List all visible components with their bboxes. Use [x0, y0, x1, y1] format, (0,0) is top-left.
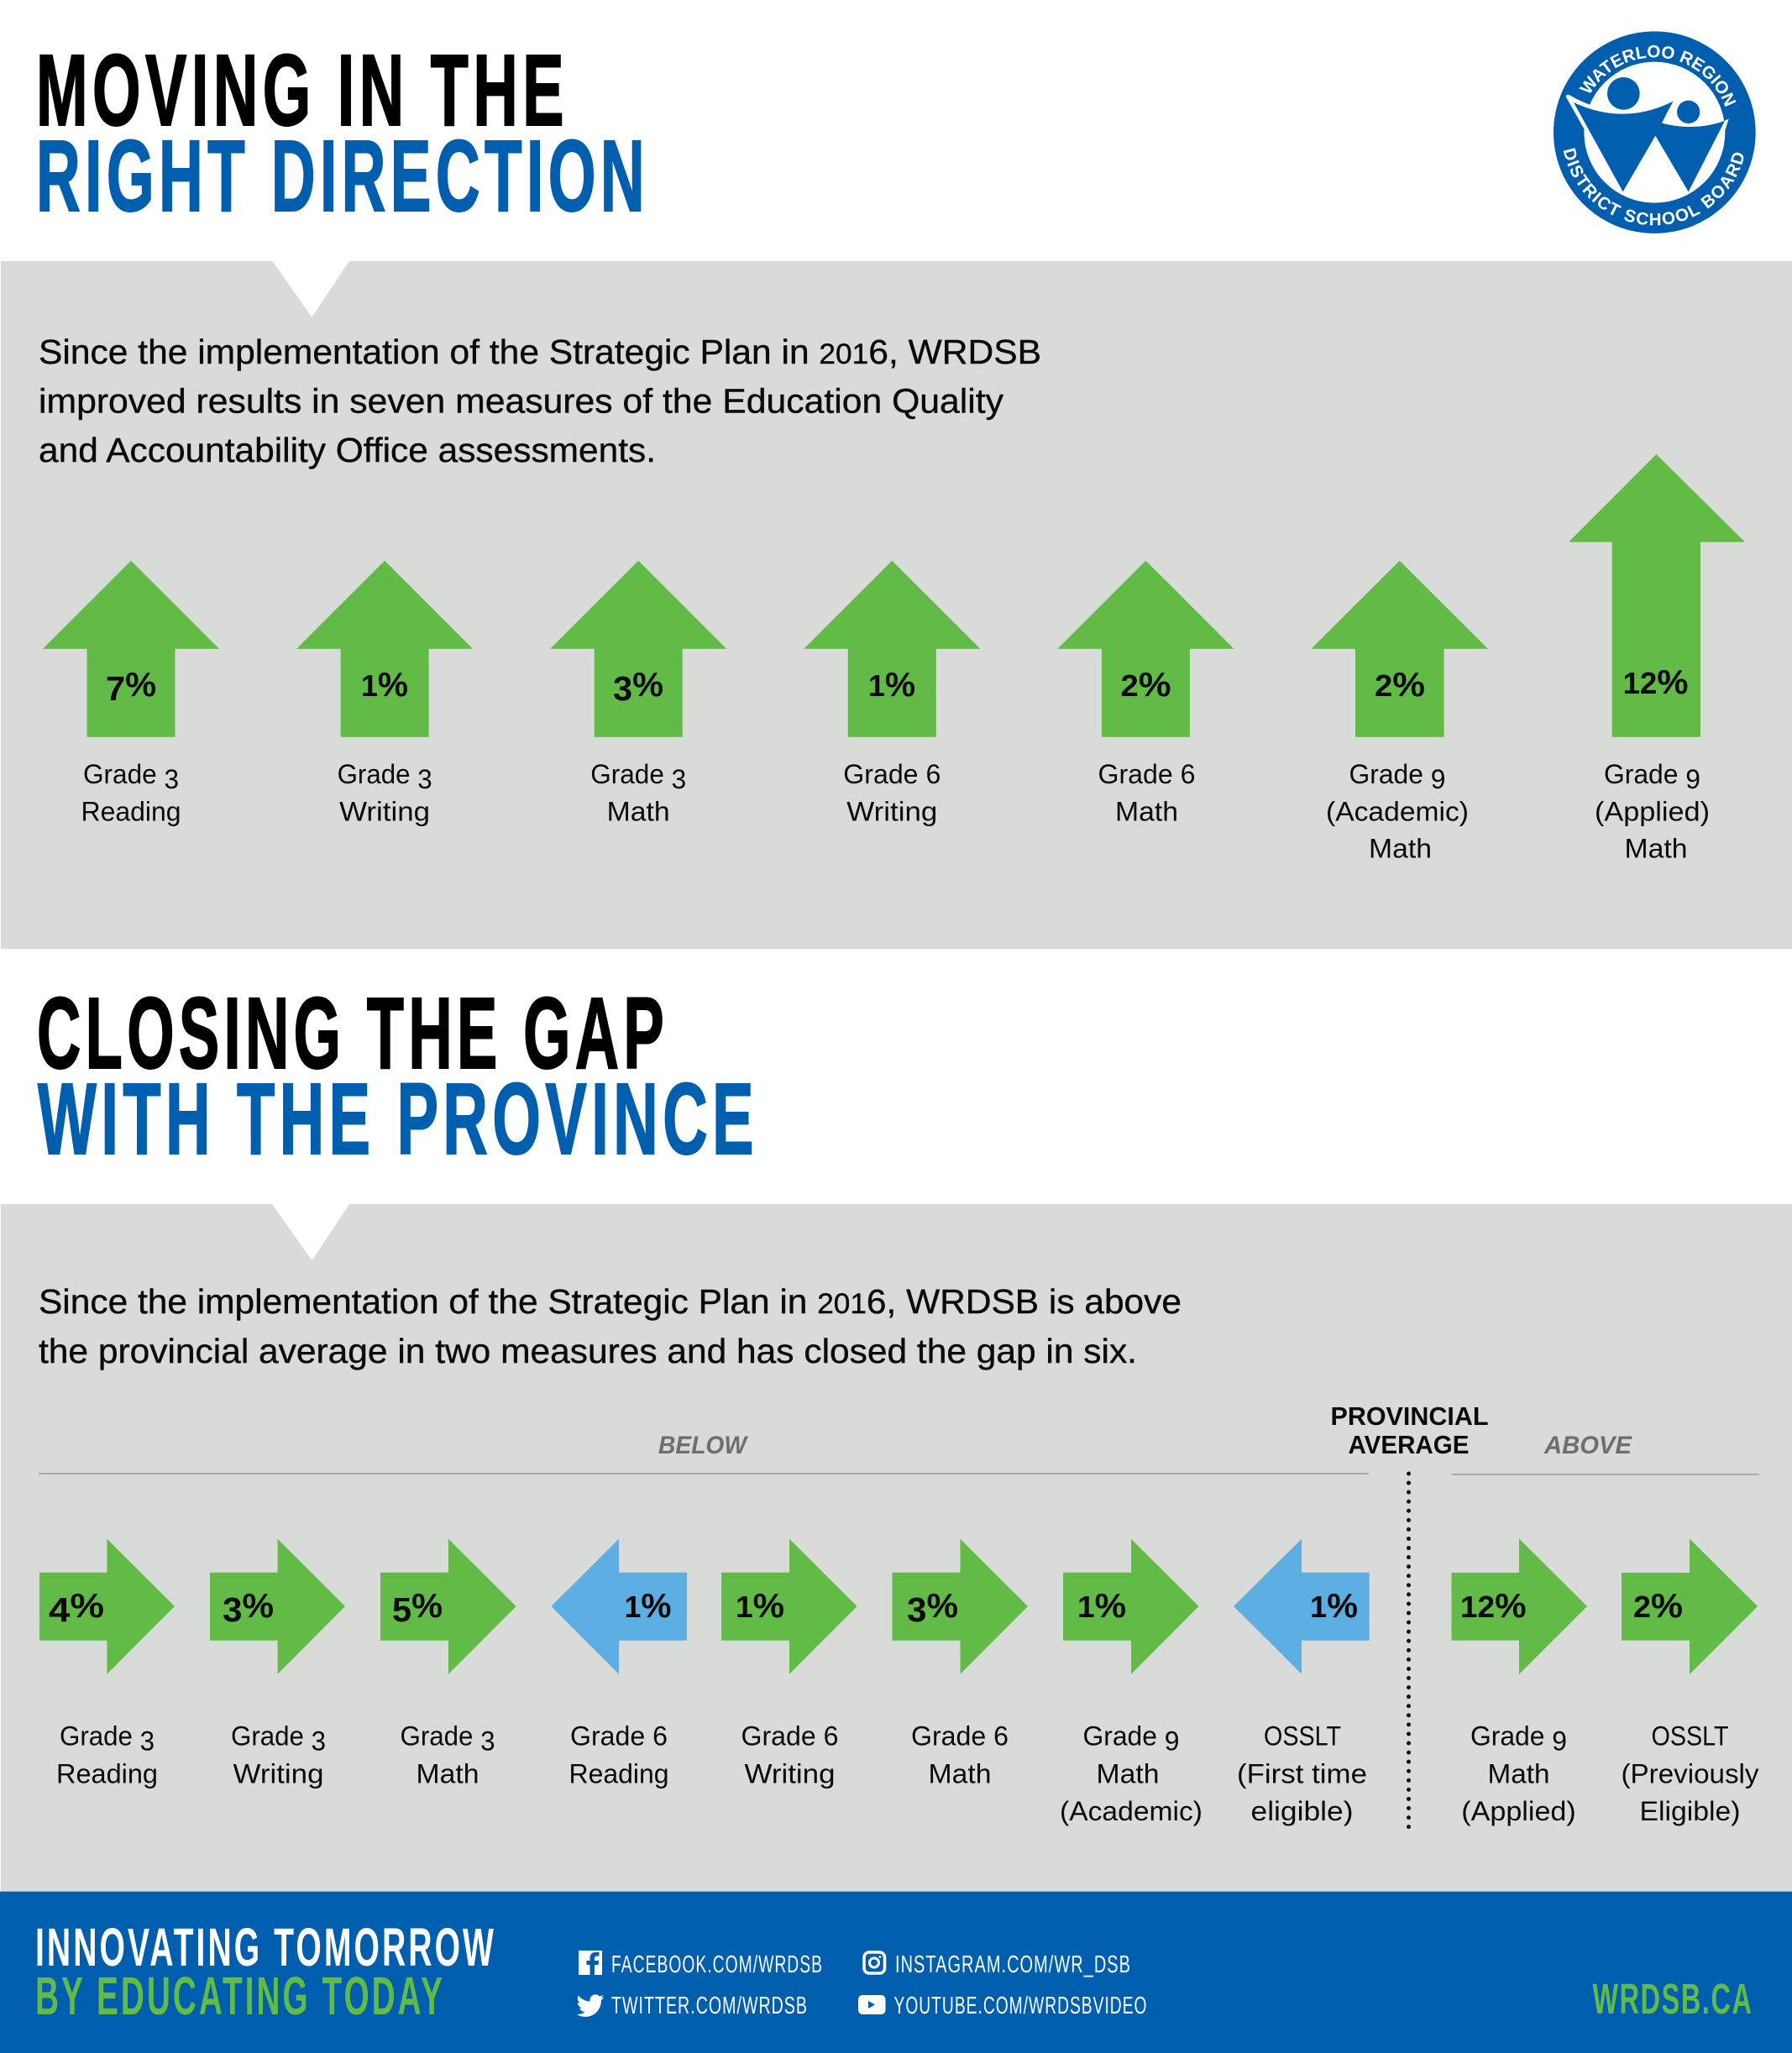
value: 3 [613, 669, 632, 708]
footer tagline: INNOVATING TOMORROW [35, 1917, 496, 1977]
up arrow [296, 561, 473, 737]
value: % [70, 1586, 104, 1625]
footer band [0, 1892, 1792, 2053]
title: closing the gap with the province: WITH THE PROVINCE [38, 1061, 758, 1176]
up arrow [1569, 454, 1745, 737]
label: 3 [672, 764, 686, 794]
intro text [39, 1282, 1182, 1370]
up arrow [550, 561, 726, 737]
intro text: and Accountability Office assessments. [39, 431, 656, 469]
right arrow [380, 1539, 516, 1674]
label: Writing [233, 1758, 324, 1789]
label: Writing [846, 796, 937, 826]
up arrow [804, 561, 980, 737]
right arrow [892, 1539, 1028, 1674]
label: (Applied) [1595, 796, 1710, 826]
scale heading: above: ABOVE [1543, 1432, 1632, 1459]
measure: Grade 3 Math 5% [380, 1539, 516, 1789]
label [1621, 1721, 1758, 1826]
label: Grade [1083, 1721, 1157, 1752]
label [569, 1721, 668, 1789]
label: 9 [1552, 1726, 1567, 1757]
value: % [125, 665, 156, 704]
label [1060, 1721, 1203, 1826]
measure: Grade 9 Applied Math 12% [1569, 454, 1745, 863]
label: Reading [56, 1758, 158, 1789]
label: (Academic) [1060, 1796, 1203, 1826]
title: moving in the right direction [36, 33, 649, 233]
label: Grade [60, 1721, 134, 1752]
footer tagline [35, 1917, 496, 2026]
label: 3 [164, 764, 179, 794]
label: Reading [569, 1758, 668, 1789]
up arrow [1057, 561, 1234, 737]
label: Math [417, 1758, 479, 1789]
label: Reading [81, 796, 181, 826]
label: OSSLT [1264, 1721, 1341, 1752]
measure: Grade 3 Writing 3% [210, 1539, 345, 1789]
value: % [411, 1586, 443, 1625]
intro text: Since the implementation of the Strategic Plan in 2016, WRDSB [39, 333, 1041, 371]
value: 12% [1460, 1586, 1527, 1625]
label: eligible) [1251, 1796, 1354, 1826]
label: Grade 6 [570, 1721, 668, 1752]
panel background with notch [1, 261, 1792, 949]
intro text: Since the implementation of the Strategic Plan in 2016, WRDSB is above [39, 1282, 1182, 1321]
panel: results improved [1, 261, 1792, 949]
logo: Waterloo Region District School Board: WATERLOO REGION [1579, 45, 1737, 107]
label: Grade [83, 759, 158, 789]
label: Grade [400, 1721, 474, 1752]
social link: instagram: INSTAGRAM.COM/WR_DSB [895, 1951, 1131, 1978]
measure: OSSLT Previously Eligible 2% [1621, 1538, 1758, 1826]
label [400, 1721, 495, 1789]
label: 9 [1431, 764, 1446, 794]
measure: Grade 3 Writing 1% [296, 561, 473, 826]
title: closing the gap with the province [37, 976, 758, 1176]
value: 2% [1633, 1586, 1683, 1625]
label: Math [1624, 833, 1688, 863]
value: 3 [907, 1590, 926, 1629]
measure: Grade 6 Reading 1% [551, 1539, 687, 1789]
label: Grade [1349, 759, 1423, 789]
label [741, 1721, 838, 1789]
title: closing the gap with the province: CLOSING THE GAP [37, 976, 668, 1090]
measure: Grade 9 Math Academic 1% [1060, 1539, 1203, 1826]
label [1098, 759, 1196, 826]
scale heading: below: BELOW [658, 1432, 749, 1459]
title: moving in the right direction: RIGHT DIRECTION [36, 118, 649, 233]
label: Eligible) [1639, 1796, 1740, 1826]
label: (Academic) [1326, 796, 1469, 826]
measure: Grade 9 Academic Math 2% [1312, 561, 1488, 863]
label: Grade 6 [843, 759, 941, 789]
intro text [39, 333, 1041, 469]
footer tagline: BY EDUCATING TODAY [35, 1966, 445, 2026]
social link: youtube: YOUTUBE.COM/WRDSBVIDEO [893, 1993, 1147, 2019]
measure: Grade 6 Math 2% [1057, 561, 1234, 826]
label: 9 [1165, 1726, 1179, 1757]
left arrow [1234, 1539, 1370, 1674]
value: % [926, 1586, 958, 1625]
title: moving in the right direction: MOVING IN THE [36, 33, 569, 147]
value: 12% [1622, 663, 1688, 701]
intro text: improved results in seven measures of the Education Quality [39, 381, 1004, 420]
label: (Applied) [1461, 1796, 1576, 1826]
label: 3 [140, 1726, 155, 1757]
right arrow [721, 1539, 857, 1674]
label [590, 759, 686, 826]
scale heading: provincial average [1330, 1401, 1488, 1459]
value: % [632, 665, 663, 704]
intro text: the provincial average in two measures and has closed the gap in six. [39, 1332, 1137, 1370]
label: Math [1115, 796, 1178, 826]
label: Writing [339, 796, 430, 826]
panel background with notch [1, 1204, 1792, 1892]
label: Writing [744, 1758, 835, 1789]
label: (Previously [1621, 1758, 1758, 1789]
label: Grade [231, 1721, 306, 1752]
measure: Grade 9 Math Applied 12% [1451, 1538, 1587, 1826]
scale heading: provincial average: PROVINCIAL [1330, 1401, 1488, 1431]
value: 1% [625, 1586, 672, 1625]
value: 3 [223, 1590, 242, 1629]
label: 3 [312, 1726, 326, 1757]
social link: twitter: TWITTER.COM/WRDSB [611, 1993, 808, 2019]
value: 4 [49, 1590, 71, 1629]
measure: Grade 6 Writing 1% [721, 1539, 857, 1789]
label [81, 759, 181, 826]
label [56, 1721, 158, 1789]
label: Math [1369, 833, 1432, 863]
left arrow [551, 1539, 687, 1674]
panel: gap with the province [1, 1204, 1792, 1892]
label: OSSLT [1651, 1721, 1728, 1752]
value: 5 [392, 1590, 411, 1629]
label: Grade [1470, 1721, 1545, 1752]
icon: twitter [577, 1994, 604, 2017]
logo: Waterloo Region District School Board: DISTRICT SCHOOL BOARD [1564, 148, 1743, 225]
right arrow [39, 1539, 175, 1674]
label [1237, 1721, 1367, 1826]
label: Math [1097, 1758, 1159, 1789]
up arrow [43, 561, 219, 737]
icon: youtube [858, 1995, 885, 2014]
label [911, 1721, 1009, 1789]
label: Math [1488, 1758, 1550, 1789]
label: Math [929, 1758, 991, 1789]
value: 1% [361, 665, 408, 704]
social link: facebook: FACEBOOK.COM/WRDSB [611, 1951, 823, 1978]
right arrow [1451, 1538, 1587, 1674]
value: 1% [868, 665, 915, 704]
label: (First time [1237, 1758, 1367, 1789]
icon: facebook [579, 1951, 602, 1975]
label [231, 1721, 326, 1789]
label: Grade 6 [741, 1721, 838, 1752]
value: 1% [736, 1586, 784, 1625]
measure: Grade 3 Reading 7% [43, 561, 219, 826]
logo: Waterloo Region District School Board [1554, 31, 1756, 233]
value: 1% [1077, 1586, 1126, 1625]
label: Grade 6 [1098, 759, 1196, 789]
value: 7 [106, 669, 125, 708]
measure: Grade 3 Reading 4% [39, 1539, 175, 1789]
label: Grade [1604, 759, 1679, 789]
label [843, 759, 941, 826]
measure: Grade 6 Math 3% [892, 1539, 1028, 1789]
value: 2% [1120, 665, 1171, 704]
value: 1% [1310, 1586, 1358, 1625]
measure: Grade 6 Writing 1% [804, 561, 980, 826]
label [1326, 759, 1469, 863]
label: 3 [480, 1726, 495, 1757]
measure: OSSLT First time eligible 1% [1234, 1539, 1370, 1826]
icon: instagram [864, 1952, 885, 1973]
up arrow [1312, 561, 1488, 737]
label [338, 759, 432, 826]
value: % [242, 1586, 274, 1625]
label: Grade [590, 759, 665, 789]
value: 2% [1375, 665, 1425, 704]
measure: Grade 3 Math 3% [550, 561, 726, 826]
label [1595, 759, 1710, 863]
scale heading: provincial average: AVERAGE [1349, 1430, 1470, 1459]
label: 9 [1685, 764, 1700, 794]
provincial average dotted line [1407, 1474, 1411, 1828]
right arrow [1063, 1539, 1199, 1674]
label: Math [607, 796, 670, 826]
label: 3 [417, 764, 432, 794]
right arrow [210, 1539, 345, 1674]
label [1461, 1721, 1576, 1826]
right arrow [1622, 1538, 1758, 1674]
label: Grade 6 [911, 1721, 1009, 1752]
label: Grade [338, 759, 412, 789]
